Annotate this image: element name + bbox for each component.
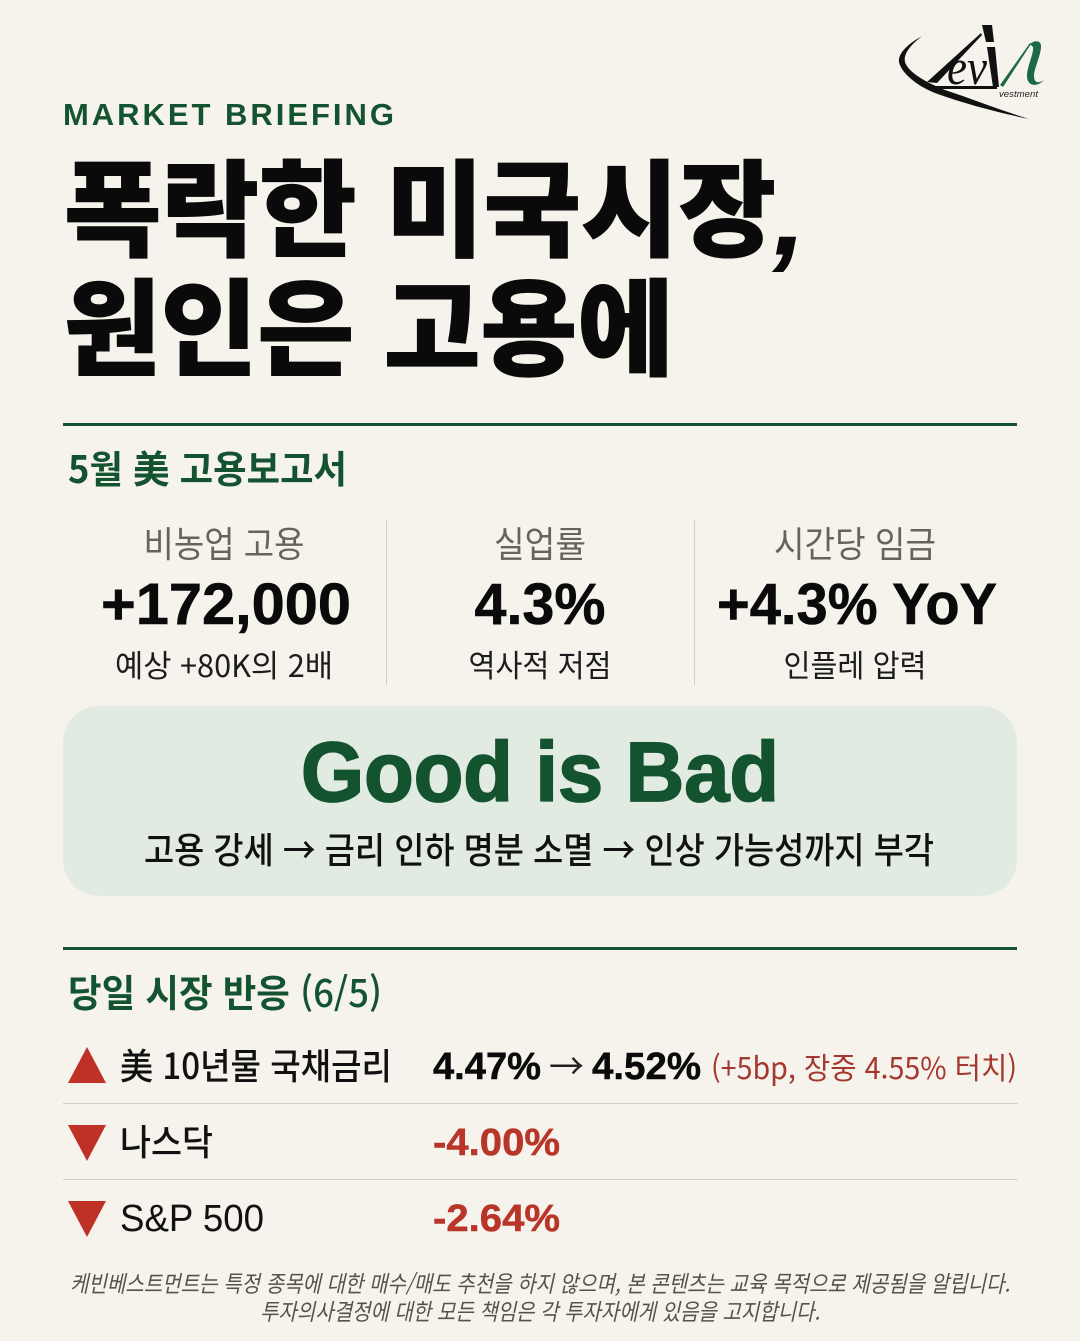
title: 폭락한 미국시장: [64, 127, 776, 279]
icon: down triangle: [68, 1125, 106, 1161]
callout: Good is Bad: Good is Bad: [301, 725, 779, 819]
stat: hourly wage: [717, 516, 997, 686]
eyebrow: market briefing: MARKET BRIEFING: [63, 97, 394, 132]
callout: Good is Bad: 고용 강세 → 금리 인하 명분 소멸 → 인상 가능성까지 부각: [144, 822, 934, 874]
row: Nasdaq: 나스닥: [120, 1114, 213, 1166]
logo: Kevin Investment: [899, 25, 1044, 119]
row: S&P 500: -2.64%: [433, 1198, 560, 1240]
stat: nonfarm payrolls: 비농업 고용: [144, 516, 304, 568]
stat: hourly wage: 시간당 임금: [774, 516, 936, 568]
row: US 10-year treasury: 4.52%: [592, 1046, 701, 1088]
stat: hourly wage: 인플레 압력: [784, 641, 926, 686]
row: Nasdaq: -4.00%: [433, 1122, 560, 1164]
stat: unemployment rate: [468, 516, 612, 686]
disclaimer: [70, 1265, 1010, 1327]
title: 원인은 고용에: [64, 246, 674, 398]
row: Nasdaq: [68, 1114, 560, 1166]
stat: nonfarm payrolls: 예상 +80K의 2배: [115, 641, 333, 686]
row: US 10-year treasury: 美 10년물 국채금리: [120, 1038, 392, 1090]
row: US 10-year treasury: 4.47%: [433, 1046, 541, 1088]
title: ,: [772, 153, 805, 278]
stats row: [101, 516, 997, 686]
row: US 10-year treasury: [68, 1038, 1017, 1090]
heading: same-day market reaction: 당일 시장 반응 (6/5): [68, 963, 382, 1018]
logo: Kevin Investment: vestment: [999, 89, 1039, 99]
row: US 10-year treasury: (+5bp, 장중 4.55% 터치): [711, 1044, 1017, 1088]
icon: up triangle: [68, 1047, 106, 1083]
callout: Good is Bad: [63, 706, 1017, 896]
stat: unemployment rate: 역사적 저점: [468, 641, 612, 686]
row: S&P 500: S&P 500: [120, 1198, 264, 1240]
icon: down triangle: [68, 1201, 106, 1237]
row: S&P 500: [68, 1198, 560, 1240]
title: [64, 127, 805, 398]
disclaimer: 투자의사결정에 대한 모든 책임은 각 투자자에게 있음을 고지합니다.: [260, 1293, 820, 1327]
logo: Kevin Investment: ev: [947, 39, 988, 95]
stat: nonfarm payrolls: +172,000: [101, 572, 351, 637]
stat: hourly wage: +4.3% YoY: [717, 572, 997, 637]
row: US 10-year treasury: →: [549, 1038, 584, 1090]
stat: unemployment rate: 4.3%: [474, 572, 606, 637]
heading: May US jobs report: 5월 美 고용보고서: [68, 439, 347, 494]
stat: nonfarm payrolls: [101, 516, 351, 686]
stat: unemployment rate: 실업률: [494, 516, 586, 568]
